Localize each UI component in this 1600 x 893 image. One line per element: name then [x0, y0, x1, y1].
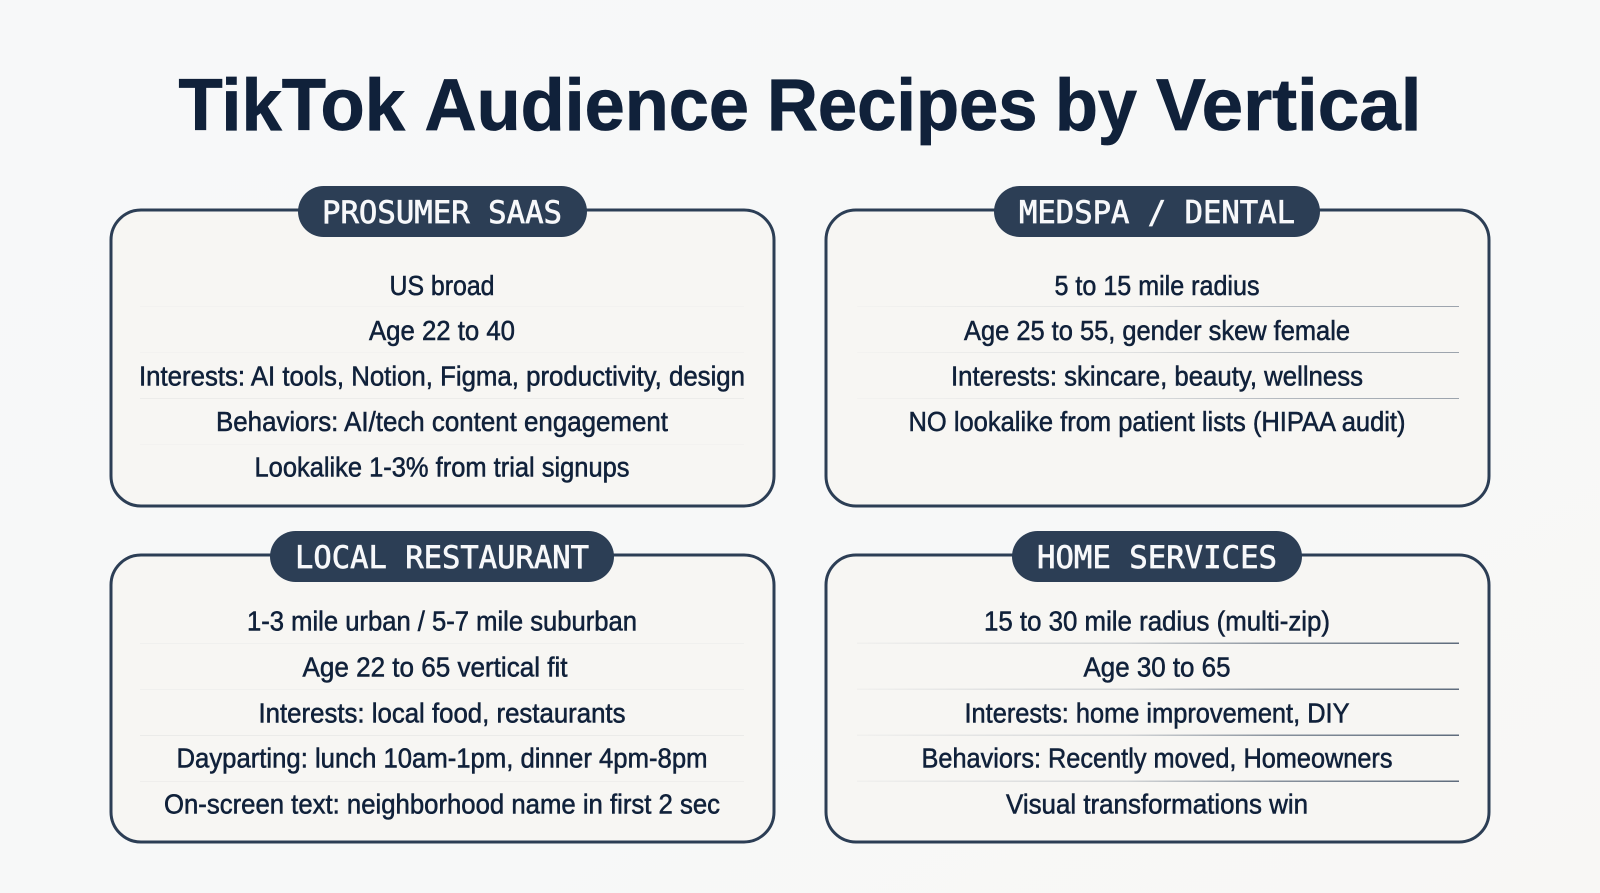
title: by — [1055, 65, 1137, 146]
recipe list: Local Restaurant: Dayparting: lunch 10am-1pm, dinner 4pm-8pm — [176, 743, 708, 774]
recipe list: Home Services: Interests: home improvement, DIY — [964, 698, 1350, 728]
heading pill: Home Services — [1012, 531, 1302, 582]
recipe list: Prosumer SaaS: Interests: AI tools, Notion, Figma, productivity, design — [139, 361, 745, 392]
recipe list: Home Services: 15 to 30 mile radius (multi-zip) — [984, 606, 1330, 637]
recipe list: Prosumer SaaS: Age 22 to 40 — [369, 315, 515, 346]
heading pill: Home Services: HOME SERVICES — [1037, 540, 1277, 576]
title — [178, 65, 1422, 146]
recipe list: Home Services: Behaviors: Recently moved, Homeowners — [922, 743, 1392, 774]
recipe list: Prosumer SaaS: Behaviors: AI/tech content engagement — [216, 406, 668, 437]
recipe list: Medspa / Dental: NO lookalike from patient lists (HIPAA audit) — [908, 406, 1406, 437]
panel: Local Restaurant — [111, 531, 774, 842]
heading pill: Medspa / Dental — [994, 186, 1320, 237]
heading pill: Local Restaurant: LOCAL RESTAURANT — [295, 540, 589, 576]
title: Vertical — [1156, 65, 1422, 146]
recipe list: Home Services: Age 30 to 65 — [1084, 652, 1230, 683]
recipe list: Prosumer SaaS: Lookalike 1-3% from trial signups — [254, 452, 630, 483]
recipe list: Medspa / Dental: 5 to 15 mile radius — [1054, 270, 1260, 301]
recipe list: Prosumer SaaS — [139, 270, 745, 483]
recipe list: Local Restaurant: On-screen text: neighborhood name in first 2 sec — [164, 788, 720, 820]
heading pill: Prosumer SaaS — [298, 186, 587, 237]
panel: Medspa / Dental — [826, 186, 1489, 506]
heading pill: Medspa / Dental: MEDSPA / DENTAL — [1019, 195, 1295, 231]
recipe list: Prosumer SaaS: US broad — [390, 270, 494, 301]
title: Audience — [424, 65, 749, 146]
heading pill: Prosumer SaaS: PROSUMER SAAS — [322, 195, 562, 231]
recipe list: Home Services — [922, 606, 1392, 820]
title: TikTok — [178, 65, 405, 146]
recipe list: Local Restaurant: 1-3 mile urban / 5-7 mile suburban — [247, 606, 637, 637]
heading pill: Local Restaurant — [270, 531, 614, 582]
recipe list: Local Restaurant: Age 22 to 65 vertical fit — [302, 652, 568, 683]
recipe list: Medspa / Dental: Interests: skincare, beauty, wellness — [951, 361, 1363, 392]
recipe list: Medspa / Dental — [908, 270, 1406, 437]
panel: Home Services — [826, 531, 1489, 842]
recipe list: Home Services: Visual transformations win — [1006, 788, 1308, 820]
recipe list: Local Restaurant — [164, 606, 720, 820]
recipe list: Medspa / Dental: Age 25 to 55, gender skew female — [964, 315, 1350, 346]
panel: Prosumer SaaS — [111, 186, 774, 506]
recipe list: Local Restaurant: Interests: local food, restaurants — [258, 698, 626, 728]
title: Recipes — [767, 65, 1038, 146]
